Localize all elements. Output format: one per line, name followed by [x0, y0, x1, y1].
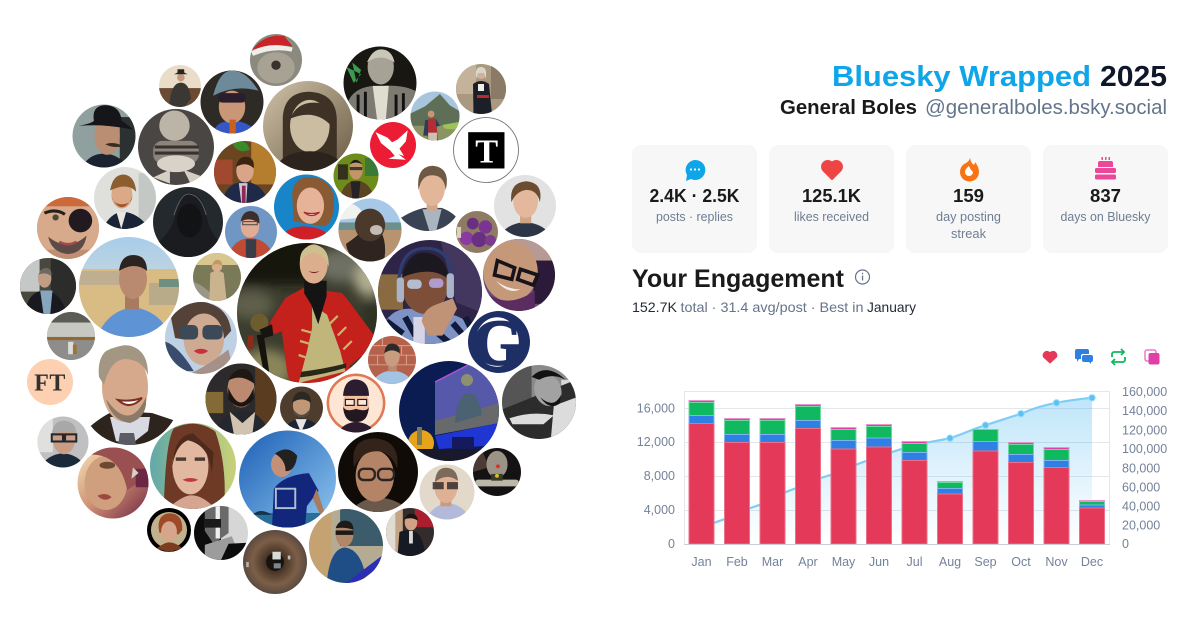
right y axis labels: 160,000 — [1122, 385, 1167, 399]
icon: repost arrows — [1112, 349, 1125, 365]
user name and handle: General Boles — [780, 97, 917, 119]
right y axis labels: 100,000 — [1122, 442, 1167, 456]
panel: day posting streak stat — [906, 145, 1031, 253]
cumulative line — [702, 398, 1092, 528]
title: Bluesky Wrapped 2025: Bluesky Wrapped — [832, 61, 1091, 93]
engagement summary line: January — [867, 299, 916, 315]
avatar: ginger bearded man — [94, 167, 156, 229]
heading: Your Engagement: Your Engagement — [632, 265, 845, 293]
avatar: black and white man — [502, 365, 576, 439]
panel: days on Bluesky stat: days on Bluesky — [1060, 210, 1151, 224]
month labels — [691, 555, 1103, 569]
panel: posts and replies stat — [632, 145, 757, 253]
month labels: Feb — [726, 555, 748, 569]
panel: likes received stat: likes received — [794, 210, 869, 224]
logo: The Times T in black square: T — [475, 133, 498, 171]
logo: Financial Times FT: FT — [34, 370, 66, 396]
icon: heart — [822, 161, 842, 179]
cumulative area — [702, 398, 1092, 544]
avatar: grey haired man in thick glasses — [38, 416, 88, 468]
right y axis labels: 60,000 — [1122, 480, 1160, 494]
panel: likes received stat: 125.1K — [802, 186, 861, 206]
icon: info — [856, 270, 870, 284]
avatar: bowler hat and moustache — [72, 104, 136, 168]
avatar: stone steps and street — [47, 312, 95, 360]
logo: The Guardian G: G — [473, 307, 523, 378]
user name and handle: @generalboles.bsky.social — [925, 97, 1167, 119]
panel: posts and replies stat: 2.4K · 2.5K — [650, 186, 740, 206]
title: Bluesky Wrapped 2025: 2025 — [1100, 61, 1167, 93]
panel: days on Bluesky stat: 837 — [1090, 186, 1121, 206]
right y axis labels: 0 — [1122, 537, 1129, 551]
month labels: Sep — [974, 555, 997, 569]
icon: replies bubbles — [1075, 349, 1093, 364]
month labels: Nov — [1045, 555, 1068, 569]
avatar: man in dark suit on red set — [386, 508, 434, 556]
panel: day posting streak stat: streak — [951, 227, 987, 241]
avatar: pope with green aeroplane — [344, 46, 416, 120]
icon: flame — [960, 158, 979, 182]
avatar: toy robot — [473, 448, 521, 496]
avatar: soft warm selfie of woman — [78, 448, 148, 518]
month labels: Mar — [762, 555, 783, 569]
avatar: man against brick wall — [368, 336, 416, 384]
chart: monthly engagement stacked bars with cumulative line — [637, 385, 1167, 569]
avatar: cartoon man with beard and glasses — [326, 374, 386, 432]
panel: day posting streak stat: 159 — [953, 186, 984, 206]
month labels: May — [832, 555, 856, 569]
panel: day posting streak stat: day posting — [936, 210, 1001, 224]
avatar: man in wide hat — [159, 65, 201, 107]
right y axis labels: 140,000 — [1122, 404, 1167, 418]
avatar: man with headphones and patterned shirt — [378, 240, 482, 344]
left y axis labels: 12,000 — [637, 435, 675, 449]
avatar: dark hooded figure — [153, 187, 223, 257]
chart legend icons — [1043, 349, 1160, 365]
avatar: bucket hat and sunglasses — [200, 70, 264, 134]
avatar: curly haired woman — [274, 174, 339, 240]
avatar: cat in santa hat — [250, 34, 302, 86]
avatar: man in suit against dark wall — [280, 386, 323, 430]
avatar: close up of brown eye — [243, 530, 307, 594]
right y axis labels: 40,000 — [1122, 500, 1160, 514]
panel: avatar bubble cluster — [20, 34, 576, 594]
avatar: baby in knitted jumper — [138, 109, 214, 185]
engagement summary line — [632, 299, 916, 315]
engagement summary line: 152.7K — [632, 299, 678, 315]
avatar: man in grey suit, white background — [401, 166, 456, 231]
logo: The Independent eagle on red — [370, 122, 416, 168]
user name and handle — [780, 97, 1167, 119]
avatar: man in green room — [334, 154, 378, 198]
avatar: man with dark curly hair and glasses — [338, 432, 418, 512]
avatar: sepia portrait of woman — [263, 81, 353, 171]
avatar: laughing man in jacket, white background — [80, 345, 180, 445]
avatar: young man in red jacket — [225, 206, 277, 258]
icon: birthday cake — [1095, 157, 1116, 180]
avatar: bald man with glasses, purple tint — [483, 239, 555, 311]
month labels: Jan — [691, 555, 712, 569]
engagement summary line: total · 31.4 avg/post · Best in — [680, 299, 864, 315]
avatar: young man on light grey — [494, 175, 556, 237]
avatar: brown bear toy on beach — [338, 198, 402, 262]
panel: days on Bluesky stat — [1043, 145, 1168, 253]
left y axis labels: 4,000 — [644, 503, 675, 517]
right y axis labels: 120,000 — [1122, 424, 1167, 438]
left y axis labels: 0 — [668, 537, 675, 551]
avatar: child with pirate eyepatch — [37, 197, 99, 259]
icon: quotes squares — [1145, 350, 1160, 364]
avatar: curly woman in big sunglasses — [165, 300, 237, 374]
month labels: Oct — [1011, 555, 1031, 569]
month labels: Jul — [907, 555, 922, 569]
stacked bars: quotes, reposts, replies, likes — [689, 400, 1104, 544]
chart grid lines — [684, 391, 1110, 544]
avatar: keynote stage with projected speaker — [399, 361, 499, 461]
avatar: man in front of bookshelves — [214, 141, 276, 203]
avatar: man in dark suit, city behind — [20, 258, 76, 314]
right y axis labels: 20,000 — [1122, 518, 1160, 532]
logo: The Times T in black square — [454, 118, 518, 182]
avatar: General Boles red coat portrait — [237, 243, 377, 383]
cumulative points — [947, 395, 1095, 441]
icon: chat bubble — [686, 160, 705, 181]
month labels: Dec — [1081, 555, 1103, 569]
month labels: Jun — [869, 555, 889, 569]
logo: Financial Times FT — [27, 359, 73, 405]
avatar: woman with long brown hair — [150, 423, 236, 509]
month labels: Apr — [798, 555, 818, 569]
left y axis labels: 16,000 — [637, 402, 675, 416]
panel: posts and replies stat: posts · replies — [656, 210, 733, 224]
x axis line — [684, 544, 1110, 546]
avatar: high contrast black and white figure — [194, 506, 248, 560]
avatar: purple flowers — [456, 211, 498, 253]
right y axis labels: 80,000 — [1122, 462, 1160, 476]
icon: likes heart — [1043, 351, 1057, 363]
left y axis labels — [637, 402, 675, 551]
avatar: man in navy t-shirt against blue sky — [239, 430, 336, 528]
avatar: man in judicial wig — [456, 64, 506, 114]
month labels: Aug — [939, 555, 961, 569]
right y axis labels — [1122, 385, 1167, 551]
avatar: bald man with black glasses — [420, 464, 474, 520]
avatar: man in blue shirt with castle — [79, 237, 179, 337]
avatar: bearded man in dark studio — [206, 364, 276, 434]
avatar: man at Machu Picchu — [410, 92, 460, 140]
avatar: red haired woman in thick black ring — [147, 508, 191, 552]
panel: likes received stat — [769, 145, 894, 253]
avatar: man with moustache in floral shirt — [309, 509, 383, 583]
avatar: blonde woman in dress on hillside — [193, 253, 241, 301]
left y axis labels: 8,000 — [644, 469, 675, 483]
